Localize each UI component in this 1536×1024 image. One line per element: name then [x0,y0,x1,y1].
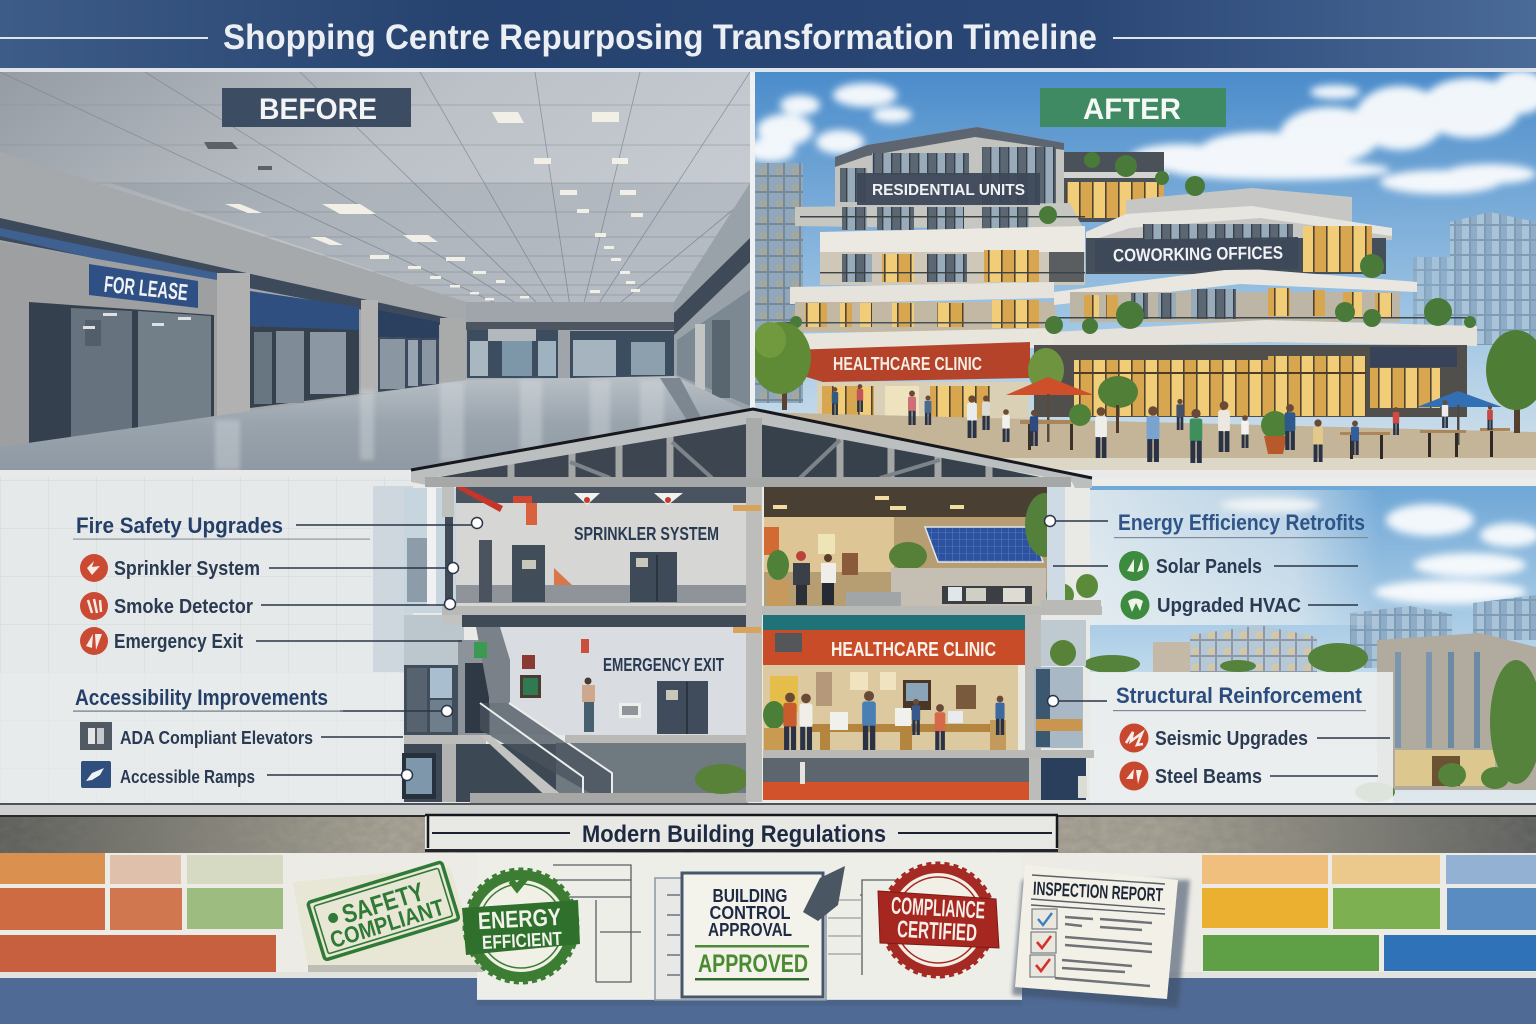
clip [803,866,845,921]
exit doors [657,681,708,734]
approval heading: BUILDING [712,886,788,906]
approval heading: CONTROL [710,903,790,923]
AFTER label: AFTER [1083,93,1181,126]
heading: Energy Efficiency Retrofits [1118,510,1365,535]
floor slabs [442,606,1102,758]
badge: energy efficient [462,870,580,982]
trees [751,322,1536,433]
staircase [470,703,748,803]
FOR LEASE sign: FOR LEASE [103,271,189,305]
roof and trusses [411,409,1092,488]
item: smoke detector [80,592,253,620]
skyline buildings [1153,595,1536,790]
blueprint paper [477,853,1022,1005]
badge: energy efficient: EFFICIENT [482,929,563,954]
room: upper right (energy retrofit) [764,487,1098,607]
plaza people [832,384,1493,463]
item: upgraded HVAC: Upgraded HVAC [1157,595,1301,617]
panel: right skyline background [1084,486,1536,806]
approval heading [708,886,792,940]
callout lines and markers [256,516,1390,780]
lower service bands [763,758,1029,800]
fire system pipes and sprinkler heads [456,485,683,525]
item: steel beams [1120,762,1262,790]
coworking offices label [1114,237,1298,270]
counter and equipment [846,568,1046,606]
room: emergency exit (lower left) [462,615,746,735]
right list: structural reinforcement [1113,683,1366,790]
document: inspection report [1012,865,1190,1008]
residential units label: RESIDENTIAL UNITS [872,182,1025,199]
item: emergency exit: Emergency Exit [114,631,243,653]
item: sprinkler system: Sprinkler System [114,558,260,580]
red umbrella [1006,377,1094,442]
title bar: modern building regulations [425,814,1058,852]
coworking offices label: COWORKING OFFICES [1113,243,1283,265]
title bar: modern building regulations: Modern Building Regulations [582,821,886,848]
clouds [745,70,1536,194]
badge: compliance certified [878,864,999,976]
ceiling lights [225,112,643,300]
heading: Fire Safety Upgrades [76,513,283,538]
item: smoke detector: Smoke Detector [114,596,253,618]
panel: after (mixed-use redevelopment) [745,70,1536,470]
healthcare clinic sign: HEALTHCARE CLINIC [833,354,982,374]
BEFORE label: BEFORE [259,93,377,126]
header banner [0,0,1536,72]
stamp: safety compliant [293,862,483,972]
panel: before (empty mall interior) [0,72,750,470]
cafe tables and plants [1020,404,1510,459]
person [582,678,595,732]
emergency exit label: EMERGENCY EXIT [603,655,724,675]
far wall [466,302,674,378]
blue umbrella [1417,391,1502,445]
document: building control approval [655,866,845,1000]
sprinkler system label: SPRINKLER SYSTEM [574,524,719,544]
heading: Accessibility Improvements [75,685,328,710]
approval heading: APPROVAL [708,920,792,940]
item: accessible ramps: Accessible Ramps [120,766,255,787]
building: ground floor cafe and shops [817,345,1467,422]
heading: Structural Reinforcement [1116,683,1363,708]
badge: energy efficient: ENERGY [477,904,562,935]
badge: compliance certified: COMPLIANCE [890,893,986,924]
item: sprinkler system [80,554,260,582]
healthcare clinic sign [790,342,1030,382]
green exit sign [474,642,487,658]
background towers [755,163,1536,403]
item: solar panels [1119,551,1262,581]
stamp: safety compliant: SAFETY [338,876,427,929]
bottom backdrop [0,853,1536,1024]
item: seismic upgrades [1120,724,1308,752]
clinic sign text: HEALTHCARE CLINIC [831,639,996,661]
people [793,551,836,605]
right list: energy efficiency retrofits [1114,510,1368,620]
building: residential upper tower [783,127,1169,350]
doors [512,545,677,602]
FOR LEASE sign [89,264,198,308]
cutaway building section [0,409,1536,805]
right colour bricks [1202,855,1536,971]
solar panels [925,527,1043,562]
title: Shopping Centre Repurposing Transformation Timeline [223,18,1097,57]
stamp: safety compliant: COMPLIANT [327,894,447,953]
left list: accessibility improvements [73,685,343,788]
left colour bricks [0,853,283,972]
bush [695,764,749,794]
residential units label [857,173,1040,205]
report title: INSPECTION REPORT [1033,879,1164,906]
ground strip [0,805,1536,854]
checklist [1030,909,1152,986]
left list: fire safety upgrades [73,513,370,655]
clinic people [783,691,1005,750]
item: accessible ramps [81,761,255,788]
side structures: left [402,487,556,802]
centre column [733,422,762,802]
item: emergency exit [80,627,243,655]
item: ADA elevators [80,722,313,750]
left wall and storefronts [0,152,466,447]
side structures: right [1025,487,1101,800]
AFTER label [1040,88,1226,127]
item: steel beams: Steel Beams [1155,766,1262,788]
building: coworking wing [1054,188,1477,348]
badge: compliance certified: CERTIFIED [896,916,978,947]
panel: left annotation background [0,476,413,806]
item: solar panels: Solar Panels [1156,556,1262,578]
approved mark: APPROVED [698,950,808,978]
room: healthcare clinic (lower right) [763,615,1025,750]
item: upgraded HVAC [1120,590,1301,620]
skyline trees [1084,643,1536,802]
room: sprinkler system (upper left) [456,485,746,607]
BEFORE label [222,88,411,127]
item: ADA elevators: ADA Compliant Elevators [120,727,313,748]
floor [0,376,750,470]
item: seismic upgrades: Seismic Upgrades [1155,728,1308,750]
rooftop and terrace plants [790,152,1476,334]
ceiling [0,72,750,302]
FOR LEASE store glass [29,302,214,445]
plaza pavement [778,412,1536,458]
right wall [674,183,750,412]
